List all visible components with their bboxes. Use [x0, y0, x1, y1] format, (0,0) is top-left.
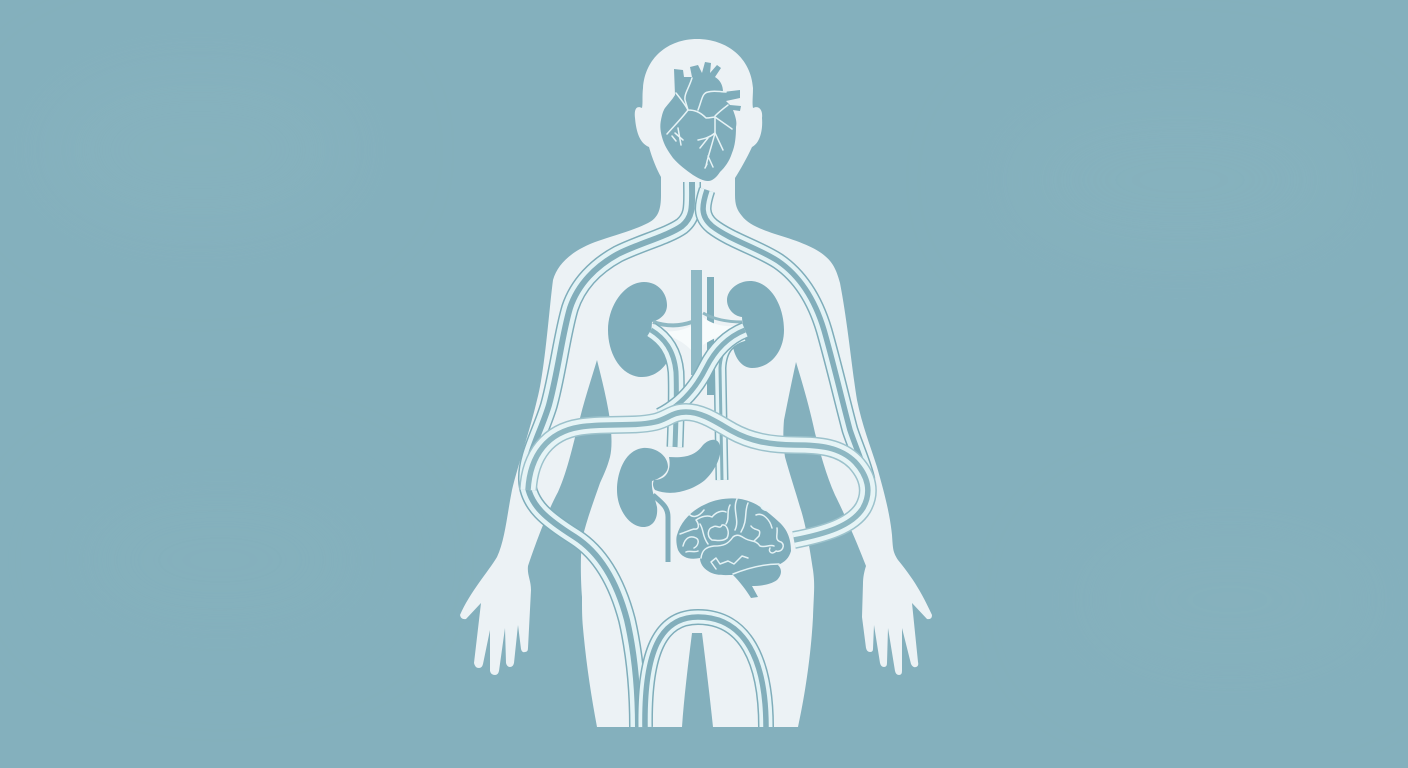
heart: [660, 62, 741, 181]
kidney: upper left: [608, 282, 670, 377]
kidney: lower left with ureter: [617, 448, 668, 562]
vessel: horizontal loop bundle: [528, 412, 868, 540]
kidney pelvis bundles: [651, 313, 745, 480]
aorta columns: [691, 270, 714, 395]
vessel: right shoulder bundle: [703, 190, 867, 480]
background mottling: [30, 60, 1400, 690]
vessel: left shoulder to leg bundle: [527, 182, 692, 727]
vessel: lower arch bundle: [645, 617, 766, 727]
organ: stomach shape: [653, 440, 721, 493]
body silhouette: [460, 39, 932, 727]
brain: [676, 498, 791, 598]
kidney: upper right: [727, 281, 784, 368]
